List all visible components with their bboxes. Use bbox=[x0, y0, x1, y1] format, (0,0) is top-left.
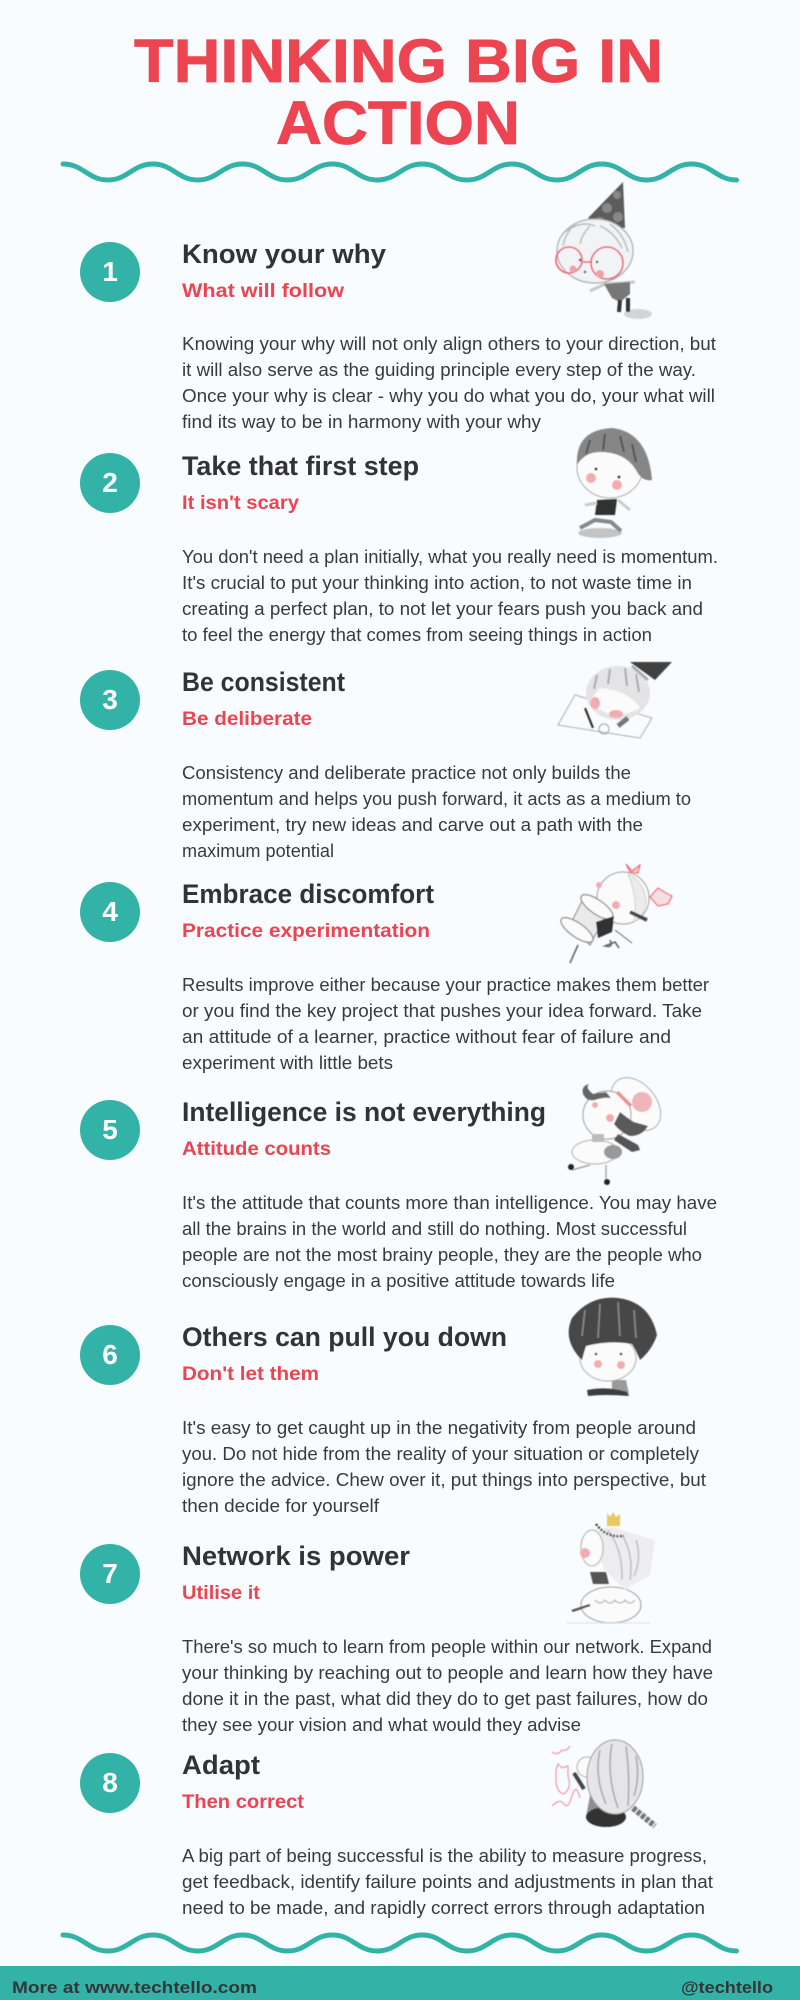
body text 4: an attitude of a learner, practice without fear of failure and bbox=[182, 1027, 671, 1047]
illustration: running boy bbox=[577, 428, 652, 538]
body text 8: A big part of being successful is the ability to measure progress, bbox=[182, 1846, 707, 1866]
heading 2: Take that first step bbox=[182, 451, 419, 481]
body text 7: There's so much to learn from people within our network. Expand bbox=[182, 1637, 712, 1657]
panel: step 3 bbox=[80, 662, 691, 861]
body text 2: You don't need a plan initially, what you really need is momentum. bbox=[182, 547, 718, 567]
heading 8: Adapt bbox=[182, 1750, 260, 1780]
body text 7: done it in the past, what did they do to get past failures, how do bbox=[182, 1689, 708, 1709]
body text 3 bbox=[182, 763, 691, 861]
subheading 5: Attitude counts bbox=[182, 1138, 331, 1160]
illustration: sitting child with dark hair bbox=[569, 1298, 657, 1396]
number badge 4 bbox=[80, 882, 140, 942]
panel: step 1 bbox=[80, 182, 716, 432]
body text 7 bbox=[182, 1637, 713, 1735]
heading 1: Know your why bbox=[182, 239, 386, 269]
body text 2: to feel the energy that comes from seeing things in action bbox=[182, 625, 652, 645]
footer bar bbox=[0, 1966, 800, 2000]
subheading 3: Be deliberate bbox=[182, 708, 312, 730]
number badge 5 bbox=[80, 1100, 140, 1160]
subheading 1: What will follow bbox=[182, 280, 345, 302]
body text 4: experiment with little bets bbox=[182, 1053, 393, 1073]
body text 8 bbox=[182, 1846, 713, 1918]
body text 2: It's crucial to put your thinking into action, to not waste time in bbox=[182, 573, 692, 593]
top wavy divider bbox=[63, 164, 737, 180]
number badge 7 bbox=[80, 1544, 140, 1604]
number badge 1: 1 bbox=[102, 256, 118, 287]
body text 1: Once your why is clear - why you do what you do, your what will bbox=[182, 386, 715, 406]
body text 1 bbox=[182, 334, 716, 432]
body text 4 bbox=[182, 975, 709, 1073]
body text 3: momentum and helps you push forward, it acts as a medium to bbox=[182, 789, 691, 809]
heading 4: Embrace discomfort bbox=[182, 879, 434, 909]
panel: step 4 bbox=[80, 864, 709, 1073]
title bbox=[134, 27, 663, 157]
body text 6 bbox=[182, 1418, 706, 1516]
number badge 5: 5 bbox=[102, 1114, 118, 1145]
number badge 2: 2 bbox=[102, 467, 118, 498]
body text 1: find its way to be in harmony with your why bbox=[182, 412, 541, 432]
number badge 6 bbox=[80, 1325, 140, 1385]
number badge 8: 8 bbox=[102, 1767, 118, 1798]
panel: step 2 bbox=[80, 428, 718, 645]
body text 3: maximum potential bbox=[182, 841, 334, 861]
panel: step 8 bbox=[80, 1740, 713, 1918]
body text 3: experiment, try new ideas and carve out a path with the bbox=[182, 815, 643, 835]
number badge 1 bbox=[80, 242, 140, 302]
body text 1: it will also serve as the guiding principle every step of the way. bbox=[182, 360, 696, 380]
body text 4: Results improve either because your practice makes them better bbox=[182, 975, 709, 995]
panel: step 6 bbox=[80, 1298, 706, 1516]
body text 2 bbox=[182, 547, 718, 645]
body text 6: then decide for yourself bbox=[182, 1496, 380, 1516]
body text 5: It's the attitude that counts more than intelligence. You may have bbox=[182, 1193, 717, 1213]
heading 3: Be consistent bbox=[182, 667, 345, 697]
illustration: child drawing on paper bbox=[558, 662, 672, 738]
panel: step 7 bbox=[80, 1512, 713, 1735]
body text 7: your thinking by reaching out to people and learn how they have bbox=[182, 1663, 713, 1683]
body text 5: consciously engage in a positive attitude towards life bbox=[182, 1271, 615, 1291]
bottom wavy divider bbox=[63, 1935, 737, 1951]
illustration: girl with hat and basket bbox=[568, 1068, 671, 1185]
heading 7: Network is power bbox=[182, 1541, 410, 1571]
subheading 8: Then correct bbox=[182, 1791, 305, 1813]
body text 6: It's easy to get caught up in the negativity from people around bbox=[182, 1418, 696, 1438]
footer link text: More at www.techtello.com bbox=[12, 1978, 257, 1997]
heading 6: Others can pull you down bbox=[182, 1322, 507, 1352]
title: THINKING BIG IN bbox=[134, 27, 663, 95]
body text 5: people are not the most brainy people, they are the people who bbox=[182, 1245, 702, 1265]
body text 1: Knowing your why will not only align others to your direction, but bbox=[182, 334, 716, 354]
subheading 7: Utilise it bbox=[182, 1582, 261, 1604]
body text 3: Consistency and deliberate practice not only builds the bbox=[182, 763, 631, 783]
number badge 7: 7 bbox=[102, 1558, 118, 1589]
illustration: girl with thread spool and needle bbox=[557, 864, 672, 963]
body text 6: ignore the advice. Chew over it, put things into perspective, but bbox=[182, 1470, 706, 1490]
body text 7: they see your vision and what would they advise bbox=[182, 1715, 581, 1735]
body text 6: you. Do not hide from the reality of your situation or completely bbox=[182, 1444, 699, 1464]
footer handle text: @techtello bbox=[681, 1978, 773, 1997]
subheading 6: Don't let them bbox=[182, 1363, 319, 1385]
illustration: princess with crown bbox=[567, 1512, 655, 1623]
body text 8: get feedback, identify failure points and adjustments in plan that bbox=[182, 1872, 713, 1892]
heading 5: Intelligence is not everything bbox=[182, 1097, 546, 1127]
body text 2: creating a perfect plan, to not let your fears push you back and bbox=[182, 599, 703, 619]
number badge 3 bbox=[80, 670, 140, 730]
body text 4: or you find the key project that pushes your idea forward. Take bbox=[182, 1001, 702, 1021]
illustration: child with party hat and red glasses bbox=[556, 182, 652, 319]
body text 5: all the brains in the world and still do nothing. Most successful bbox=[182, 1219, 687, 1239]
panel: step 5 bbox=[80, 1068, 717, 1291]
title: ACTION bbox=[276, 89, 520, 157]
number badge 3: 3 bbox=[102, 684, 118, 715]
number badge 2 bbox=[80, 453, 140, 513]
illustration: girl with braid drawing a pink cat bbox=[552, 1740, 655, 1827]
body text 8: need to be made, and rapidly correct errors through adaptation bbox=[182, 1898, 705, 1918]
body text 5 bbox=[182, 1193, 717, 1291]
number badge 4: 4 bbox=[102, 896, 118, 927]
subheading 2: It isn't scary bbox=[182, 492, 299, 514]
number badge 6: 6 bbox=[102, 1339, 118, 1370]
number badge 8 bbox=[80, 1753, 140, 1813]
subheading 4: Practice experimentation bbox=[182, 920, 430, 942]
